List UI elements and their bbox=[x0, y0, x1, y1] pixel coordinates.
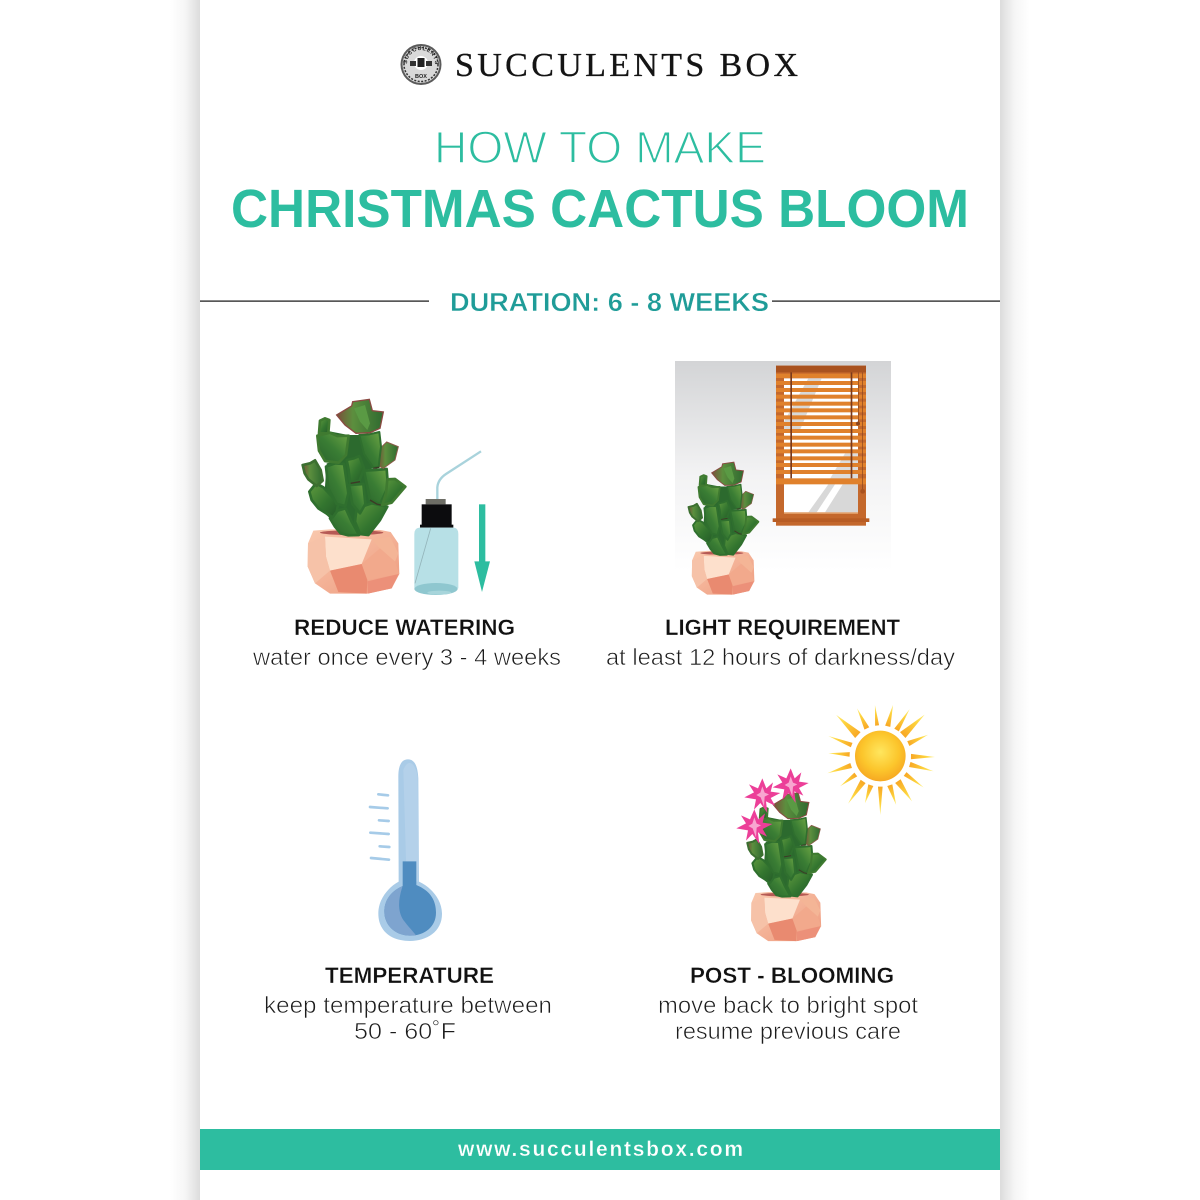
icon: pink flowers bbox=[736, 768, 809, 844]
label: light requirement: LIGHT REQUIREMENT bbox=[665, 615, 901, 640]
panel: light requirement bbox=[606, 361, 956, 670]
brand name: SUCCULENTS BOX bbox=[455, 47, 798, 84]
footer bar bbox=[200, 1129, 1000, 1170]
wall backdrop bbox=[675, 361, 891, 571]
icon: potted cactus bbox=[303, 399, 405, 594]
duration heading: DURATION: 6 - 8 WEEKS bbox=[450, 287, 769, 317]
label: reduce watering: REDUCE WATERING bbox=[294, 615, 515, 640]
panel: reduce watering bbox=[252, 399, 561, 670]
title bbox=[231, 122, 969, 239]
text: temperature range: 50 - 60˚F bbox=[354, 1018, 456, 1044]
arrow: down bbox=[474, 504, 490, 592]
page shadow bbox=[170, 0, 1030, 1200]
panel: post-blooming bbox=[658, 704, 935, 1044]
text: temperature detail: keep temperature between bbox=[264, 992, 552, 1018]
icon: watering bottle bbox=[414, 451, 481, 595]
icon: thermometer bbox=[370, 759, 442, 941]
title line 1: HOW TO MAKE bbox=[434, 122, 766, 173]
text: light detail: at least 12 hours of darkness/day bbox=[606, 644, 956, 670]
website url: www.succulentsbox.com bbox=[457, 1138, 743, 1161]
text: watering detail: water once every 3 - 4 weeks bbox=[252, 644, 561, 670]
icon: round seal bbox=[400, 44, 442, 85]
label: temperature: TEMPERATURE bbox=[325, 963, 494, 988]
title line 2: CHRISTMAS CACTUS BLOOM bbox=[231, 180, 969, 239]
icon: round seal: BOX bbox=[415, 74, 427, 80]
text: post-blooming line 2: resume previous care bbox=[675, 1018, 901, 1044]
icon: potted cactus bbox=[688, 462, 758, 595]
panel: temperature bbox=[264, 759, 552, 1044]
logo: succulents box bbox=[400, 44, 798, 85]
text: post-blooming line 1: move back to bright spot bbox=[658, 992, 919, 1018]
icon: window with blinds bbox=[773, 366, 869, 526]
icon: sun bbox=[827, 704, 935, 815]
icon: round seal: SUCCULENTS bbox=[403, 46, 439, 64]
label: post-blooming: POST - BLOOMING bbox=[690, 963, 894, 988]
icon: blooming cactus bbox=[736, 768, 826, 941]
